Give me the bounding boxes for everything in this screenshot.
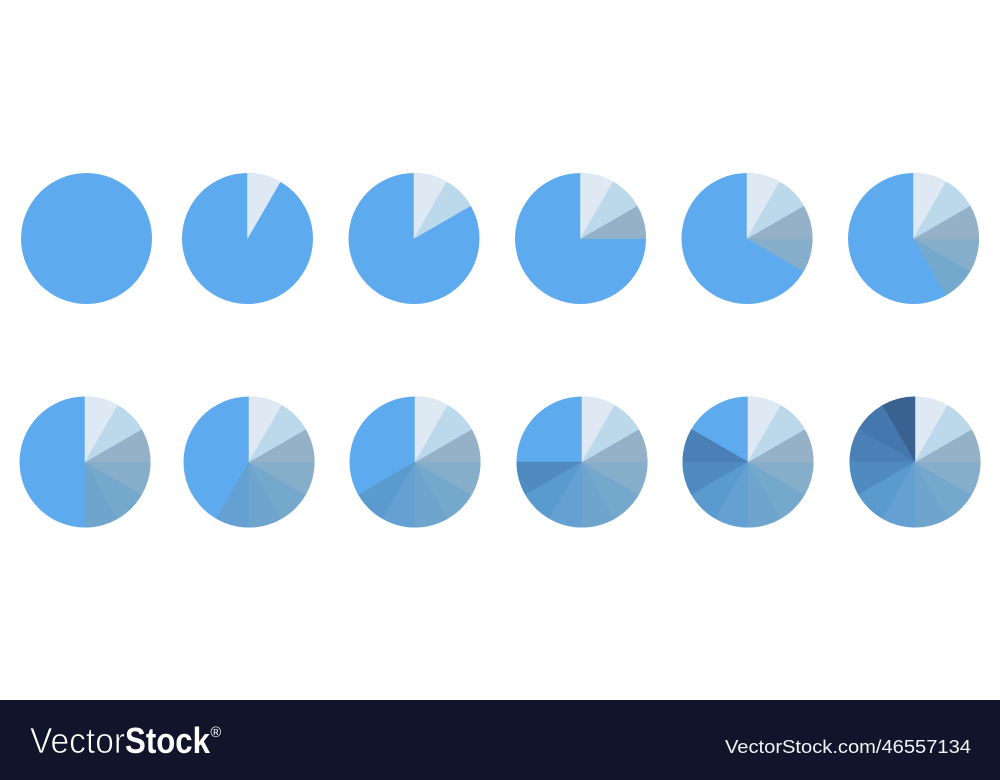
brand logo: Stock (125, 720, 211, 761)
pie chart: 7 of 12 segments (184, 396, 314, 528)
pie chart: 10 of 12 segments (682, 396, 814, 528)
brand logo: ® (210, 725, 222, 741)
image id: VectorStock.com/46557134 (725, 736, 971, 757)
pie chart: 8 of 12 segments (350, 396, 480, 528)
pie chart: 12 of 12 segments (850, 397, 980, 527)
pie chart: 1 of 12 segments (182, 173, 313, 304)
pie chart: 3 of 12 segments (515, 173, 646, 304)
pie chart: 4 of 12 segments (682, 173, 812, 304)
pie chart: 6 of 12 segments (20, 396, 150, 528)
pie chart: 9 of 12 segments (516, 396, 648, 528)
pie chart: 2 of 12 segments (348, 173, 480, 304)
pie chart: 0 of 12 segments (21, 173, 152, 304)
brand logo: Vector (30, 720, 125, 761)
footer bar (0, 700, 1000, 780)
pie chart: 5 of 12 segments (848, 173, 979, 304)
